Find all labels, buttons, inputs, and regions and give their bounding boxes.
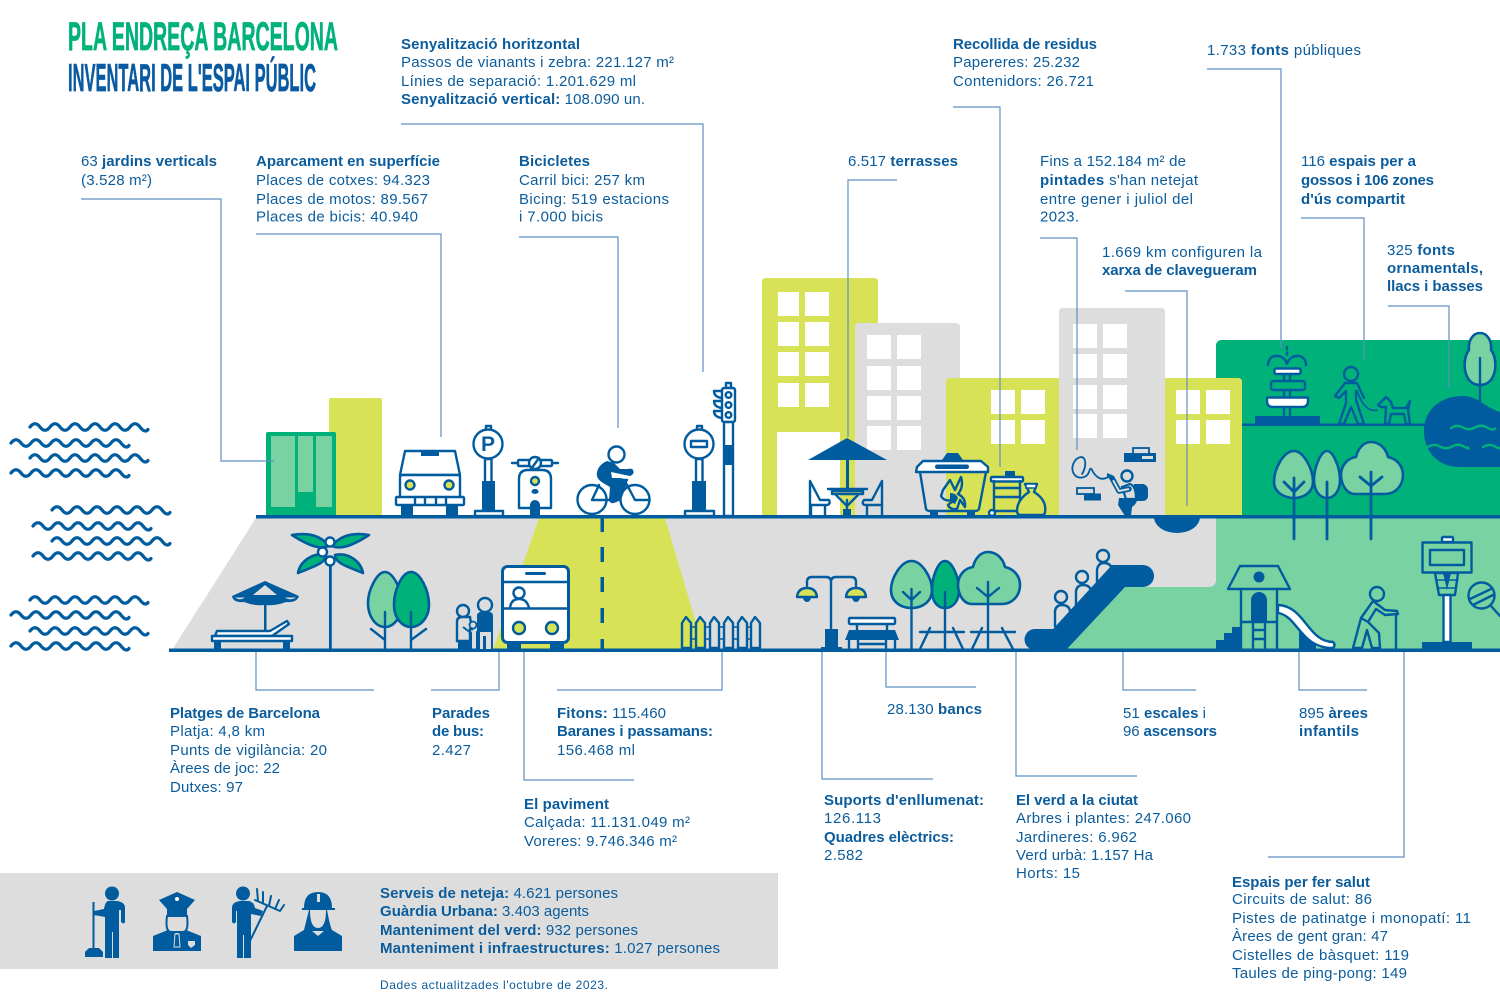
text block: suports d'enllumenat: 2.582	[824, 847, 863, 864]
text block: escales	[1123, 705, 1217, 740]
lower street grey ground	[172, 518, 1216, 650]
icon: police officer	[153, 892, 201, 951]
text block: staff numbers: Manteniment i infraestructures: 1.027 persones	[380, 940, 720, 957]
text block: verd a la ciutat: Jardineres: 6.962	[1016, 829, 1137, 846]
text block: senyalització: Línies de separació: 1.201.629 ml	[401, 73, 636, 90]
text block: bicicletes: Bicicletes	[519, 153, 590, 170]
icon: construction worker	[294, 892, 342, 951]
text block: espais per fer salut: Circuits de salut: 86	[1232, 891, 1372, 908]
text block: parades de bus: de bus:	[432, 723, 484, 740]
icon: terrace table and umbrella	[808, 438, 887, 516]
icon: traffic light	[714, 383, 735, 516]
text block: recollida de residus: Papereres: 25.232	[953, 54, 1080, 71]
text block: platges: Punts de vigilància: 20	[170, 742, 327, 759]
text block: recollida de residus: Recollida de residus	[953, 36, 1097, 53]
text block: clavegueram: 1.669 km configuren la	[1102, 244, 1263, 261]
icon: basketball hoop	[1422, 537, 1472, 649]
text block: jardins verticals	[81, 153, 217, 189]
text block: espais per fer salut: Espais per fer salut	[1232, 874, 1370, 891]
road dashed line	[600, 518, 604, 649]
text block: pintades: pintades s'han netejat	[1040, 172, 1199, 189]
text block: fonts públiques: 1.733 fonts públiques	[1207, 42, 1361, 59]
text block: suports d'enllumenat	[824, 792, 984, 864]
text block: platges: Platges de Barcelona	[170, 705, 321, 722]
text block: senyalització	[401, 36, 674, 108]
text block: pintades	[1040, 153, 1199, 226]
light green park ground	[1065, 516, 1500, 650]
icon: fence	[682, 617, 760, 648]
text block: paviment: Voreres: 9.746.346 m²	[524, 833, 677, 850]
icon: gardener with rake	[232, 886, 284, 958]
text block: bicicletes: i 7.000 bicis	[519, 208, 603, 226]
icon: street sweeper	[85, 886, 125, 958]
green park block	[1216, 340, 1500, 516]
icon: fountain	[1255, 347, 1320, 424]
text block: platges: Platja: 4,8 km	[170, 723, 265, 740]
buildings	[329, 278, 1242, 517]
text block: paviment: El paviment	[524, 796, 609, 813]
text block: escales: 51 escales i	[1123, 705, 1206, 722]
text block: fitons: Baranes i passamans:	[557, 723, 713, 740]
icon: bench	[845, 618, 899, 649]
icon: graffiti cleaner	[1072, 448, 1156, 516]
icon: sea waves	[11, 424, 170, 650]
text block: verd a la ciutat: Arbres i plantes: 247.060	[1016, 810, 1191, 827]
text block: recollida de residus: Contenidors: 26.721	[953, 73, 1094, 90]
text block: paviment: Calçada: 11.131.049 m²	[524, 814, 690, 831]
text block: espais per fer salut: Àrees de gent gran: 47	[1232, 928, 1388, 945]
text block: pintades: Fins a 152.184 m² de	[1040, 153, 1186, 170]
text block: aparcament: Places de cotxes: 94.323	[256, 172, 430, 189]
text block: fonts ornamentals: 325 fonts	[1387, 242, 1455, 259]
icon: pond and tree	[1424, 333, 1500, 467]
text block: parades de bus: 2.427	[432, 742, 471, 759]
text block: espais per fer salut	[1232, 874, 1471, 982]
icon: cyclist	[578, 446, 650, 514]
text block: platges	[170, 705, 327, 796]
text block: àrees infantils: 895 àrees	[1299, 705, 1368, 722]
text block: jardins verticals: 63 jardins verticals	[81, 153, 217, 170]
text: PLA ENDREÇA BARCELONA	[68, 15, 338, 59]
text block: escales: 96 ascensors	[1123, 723, 1217, 740]
icon: ping-pong paddle	[1468, 582, 1500, 616]
text block: aparcament: Aparcament en superfície	[256, 153, 440, 170]
text block: jardins verticals: (3.528 m²)	[81, 172, 152, 189]
text block: verd a la ciutat	[1016, 792, 1191, 882]
text block: pintades: entre gener i juliol del	[1040, 191, 1193, 208]
text block: bancs: 28.130 bancs	[887, 701, 982, 718]
lime road	[493, 518, 704, 650]
text block: fitons	[557, 705, 713, 759]
icon: beach trees	[368, 572, 429, 650]
panel: staff	[0, 873, 778, 969]
text block: espais per fer salut: Cistelles de bàsquet: 119	[1232, 947, 1409, 964]
text block: senyalització: Senyalització vertical: 108.090 un.	[401, 91, 645, 108]
text block: espais per fer salut: Pistes de patinatge i monopatí: 11	[1232, 910, 1471, 927]
icon: vertical garden	[266, 432, 336, 517]
text block: platges: Àrees de joc: 22	[170, 760, 280, 777]
text block: espais per a gossos	[1301, 153, 1434, 208]
text block: bicicletes: Carril bici: 257 km	[519, 172, 645, 189]
text block: suports d'enllumenat: Quadres elèctrics:	[824, 829, 954, 846]
text block: platges: Dutxes: 97	[170, 779, 243, 796]
icon: city trees and picnic tables	[891, 552, 1020, 649]
icon: parking sign: P	[481, 433, 495, 456]
text block: fonts ornamentals: ornamentals,	[1387, 260, 1483, 277]
text block: staff numbers: Manteniment del verd: 932 persones	[380, 922, 638, 939]
icon: parking sign	[474, 426, 503, 516]
text block: senyalització: Passos de vianants i zebra: 221.127 m²	[401, 54, 674, 71]
text block: àrees infantils	[1299, 705, 1368, 740]
icon: no-entry sign	[684, 426, 714, 516]
text block: aparcament: Places de bicis: 40.940	[256, 208, 418, 226]
text block: bicicletes: Bicing: 519 estacions	[519, 191, 669, 208]
park upper level line	[1242, 424, 1426, 426]
text block: recollida de residus	[953, 36, 1097, 90]
icon: street lamp	[797, 577, 866, 649]
text: INVENTARI DE L'ESPAI PÚBLIC	[68, 56, 316, 100]
text block: espais per fer salut: Taules de ping-pong: 149	[1232, 965, 1407, 982]
text block: verd a la ciutat: El verd a la ciutat	[1016, 792, 1138, 809]
icon: beach umbrella and lounger	[212, 581, 299, 649]
footnote: Dades actualitzades l'octubre de 2023.	[380, 978, 608, 992]
text block: verd a la ciutat: Verd urbà: 1.157 Ha	[1016, 847, 1154, 864]
icon: scooter	[512, 457, 558, 516]
icon: palm tree	[292, 534, 369, 650]
text block: paviment	[524, 796, 690, 850]
text block: senyalització: Senyalització horitzontal	[401, 36, 580, 53]
text block: aparcament: Places de motos: 89.567	[256, 191, 428, 208]
text block: bicicletes	[519, 153, 669, 226]
street lines	[169, 515, 1500, 652]
title	[68, 15, 338, 100]
icon: bus	[502, 566, 568, 649]
panel: street scene backgrounds	[172, 340, 1500, 650]
text block: staff numbers	[380, 885, 720, 957]
text block: espais per a gossos: d'ús compartit	[1301, 191, 1405, 208]
text block: aparcament	[256, 153, 440, 226]
text block: clavegueram: xarxa de clavegueram	[1102, 262, 1257, 279]
icon: elderly person with cane	[1353, 587, 1398, 649]
text block: clavegueram	[1102, 244, 1263, 279]
icon: park trees	[1274, 442, 1403, 539]
text block: suports d'enllumenat: 126.113	[824, 810, 881, 827]
text block: terrasses: 6.517 terrasses	[848, 153, 958, 170]
icon: playground	[1216, 566, 1334, 649]
icon: escalator with people	[1024, 550, 1154, 650]
text block: staff numbers: Guàrdia Urbana: 3.403 agents	[380, 903, 589, 920]
text block: fonts ornamentals: llacs i basses	[1387, 278, 1483, 295]
text block: staff numbers: Serveis de neteja: 4.621 persones	[380, 885, 618, 902]
text block: espais per a gossos: gossos i 106 zones	[1301, 172, 1434, 189]
text block: fonts ornamentals	[1387, 242, 1483, 295]
text block: àrees infantils: infantils	[1299, 723, 1359, 740]
icon: rubbish dumpster	[916, 453, 1045, 516]
icon: person walking dog	[1335, 367, 1410, 424]
text block: espais per a gossos: 116 espais per a	[1301, 153, 1417, 170]
text block: suports d'enllumenat: Suports d'enllumenat:	[824, 792, 984, 809]
text block: verd a la ciutat: Horts: 15	[1016, 865, 1080, 882]
text block: fitons: Fitons: 115.460	[557, 705, 666, 722]
leader lines	[81, 69, 1449, 857]
icon: family at bus stop	[457, 598, 493, 649]
icon: car	[396, 451, 464, 516]
icon: sewer half circle	[1154, 517, 1200, 533]
text block: fitons: 156.468 ml	[557, 742, 635, 759]
text block: parades de bus	[432, 705, 490, 759]
text block: pintades: 2023.	[1040, 208, 1079, 226]
text block: parades de bus: Parades	[432, 705, 490, 722]
